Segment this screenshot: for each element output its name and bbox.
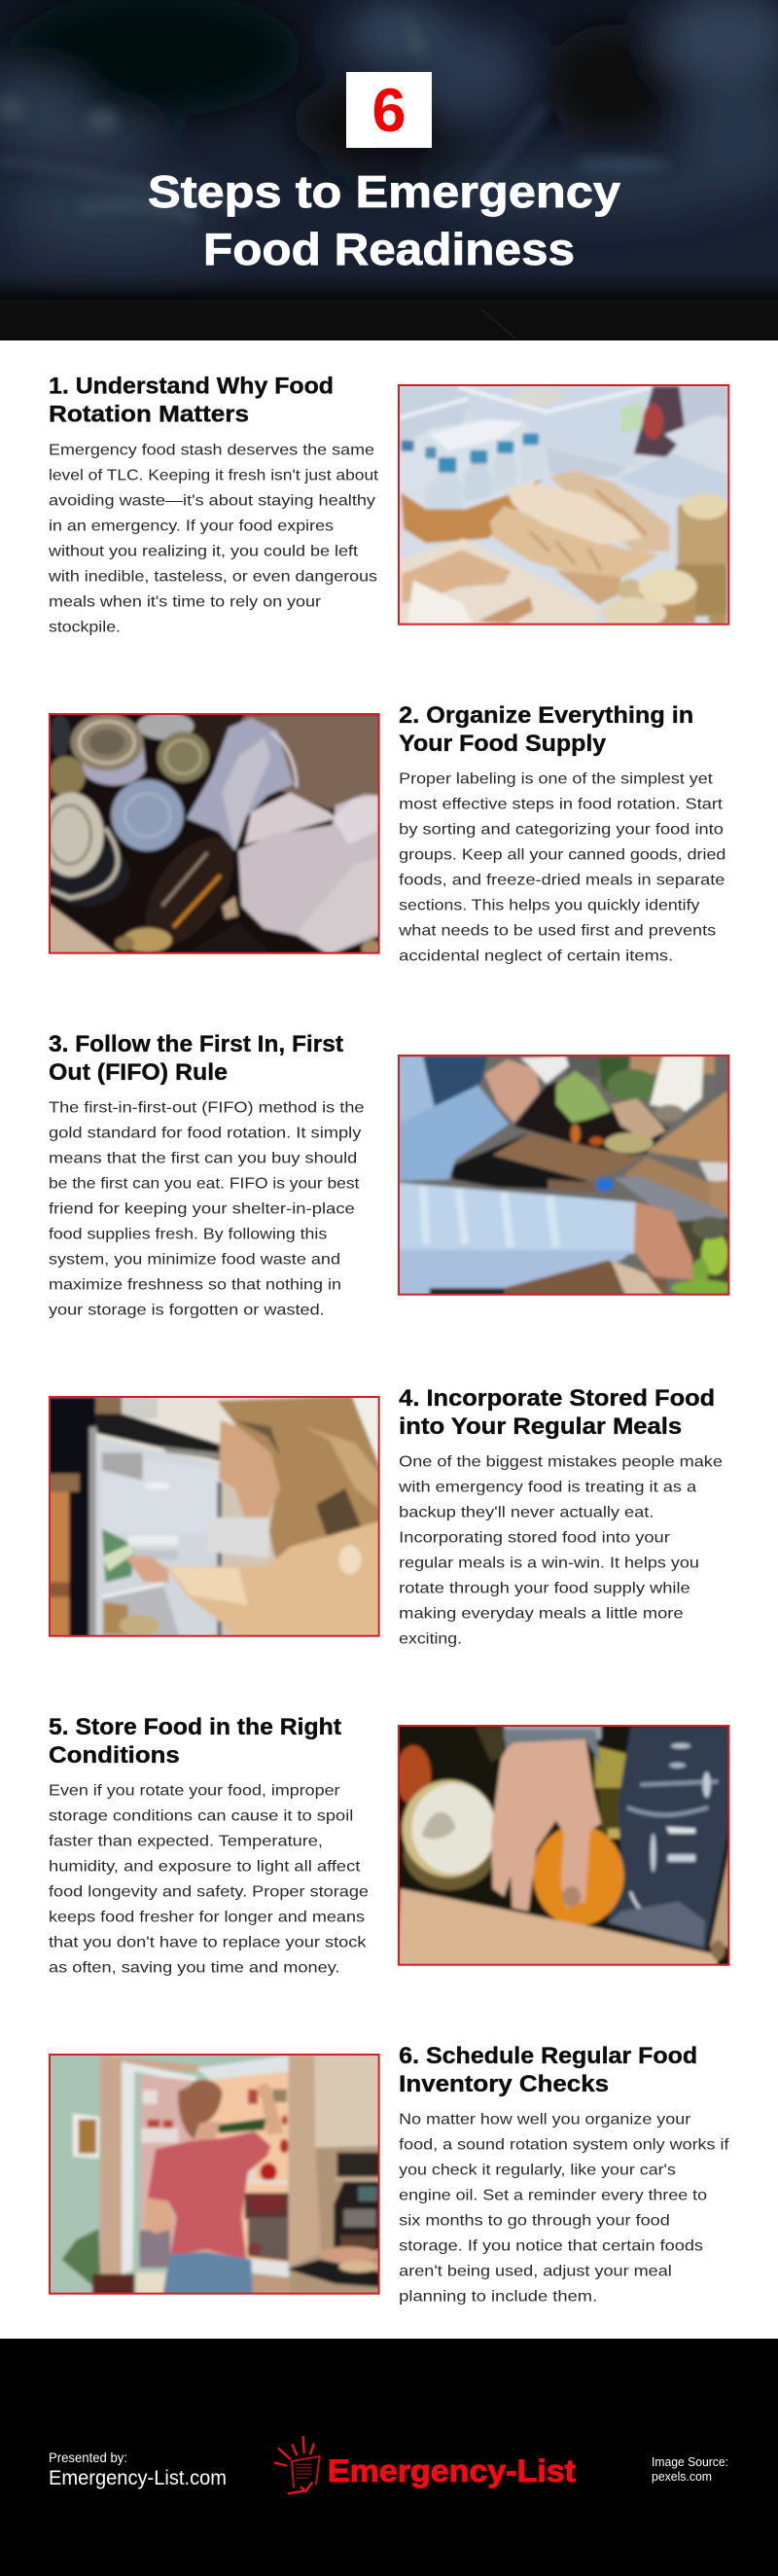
text block: step 3: gold standard for food rotation. It simply — [49, 1125, 361, 1142]
frame — [399, 1055, 728, 1295]
text block: step 1: meals when it's time to rely on your — [49, 593, 322, 610]
text block: step 2: most effective steps in food rotation. Start — [399, 797, 724, 813]
presenter credit — [49, 2450, 227, 2489]
text block: step 5: as often, saving you time and money. — [49, 1960, 340, 1977]
text block: step 2: Proper labeling is one of the simplest yet — [399, 771, 713, 788]
text block: step 6: six months to go through your food — [399, 2213, 670, 2230]
panel: step 2 — [39, 702, 725, 965]
text block: step 5: humidity, and exposure to light all affect — [49, 1859, 361, 1876]
heading: step 5: 5. Store Food in the Right — [49, 1714, 341, 1740]
image source credit — [652, 2454, 728, 2484]
text block: step 5: keeps food fresher for longer and means — [49, 1910, 365, 1926]
text block: step 4: making everyday meals a little more — [399, 1606, 684, 1623]
text block: step 6: you check it regularly, like your car's — [399, 2163, 676, 2179]
heading: step 5: Conditions — [49, 1742, 180, 1769]
heading: step 2 — [399, 702, 693, 757]
text block: step 1: in an emergency. If your food expires — [49, 518, 334, 534]
text block: step 3: The first-in-first-out (FIFO) method is the — [49, 1099, 365, 1117]
text block: step 4: rotate through your food supply while — [399, 1581, 690, 1597]
logo — [275, 2437, 576, 2493]
number badge: 6 — [371, 77, 407, 145]
text block: step 3: maximize freshness so that nothing in — [49, 1276, 341, 1294]
text block: step 2: groups. Keep all your canned goods, dried — [399, 847, 725, 864]
photo: people packing a food box — [394, 1050, 734, 1301]
text block: step 1: stockpile. — [49, 619, 121, 635]
text block: step 6: storage. If you notice that certain foods — [399, 2238, 703, 2255]
panel: step 6 — [44, 2043, 729, 2306]
photo: canned goods and cloth bags in a box — [39, 708, 384, 960]
text block: step 4: Incorporating stored food into your — [399, 1530, 671, 1547]
text block: step 1: with inedible, tasteless, or even dangerous — [48, 568, 377, 585]
image source credit: Image Source: — [652, 2454, 728, 2469]
heading: step 4 — [399, 1385, 715, 1440]
text block: step 1 — [48, 442, 379, 635]
text block: step 4: backup they'll never actually eat. — [399, 1505, 654, 1521]
title: Steps to Emergency — [148, 166, 620, 217]
footer panel — [0, 2339, 778, 2576]
heading: step 6: Inventory Checks — [399, 2071, 609, 2097]
text block: step 4 — [398, 1454, 723, 1648]
text block: step 2: what needs to be used first and prevents — [398, 923, 716, 940]
logo wordmark: Emergency-List — [328, 2453, 576, 2488]
photo: storage bins, water bottles, pasta and cans — [394, 379, 734, 630]
text block: step 4: with emergency food is treating it as a — [398, 1480, 696, 1496]
header panel — [0, 0, 778, 358]
title — [149, 175, 620, 266]
photo: woman in red shirt at an open refrigerator — [44, 2049, 384, 2300]
text block: step 1: level of TLC. Keeping it fresh isn't just about — [49, 467, 379, 483]
text block: step 2: sections. This helps you quickly identify — [399, 898, 699, 914]
frame — [50, 2055, 379, 2294]
heading: step 6 — [399, 2043, 697, 2097]
panel: step 4 — [44, 1385, 723, 1648]
text block: step 5: faster than expected. Temperature, — [49, 1834, 323, 1850]
frame — [399, 385, 728, 625]
heading: step 1: 1. Understand Why Food — [49, 374, 334, 400]
text block: step 6: aren't being used, adjust your meal — [399, 2264, 672, 2280]
text block: step 6: planning to include them. — [399, 2289, 597, 2306]
icon: checklist with rays — [275, 2437, 320, 2493]
number badge — [346, 72, 432, 148]
frame — [50, 714, 379, 953]
storm cloud background — [0, 0, 778, 358]
text block: step 3: friend for keeping your shelter-in-place — [49, 1200, 355, 1218]
text block: step 3: food supplies fresh. By following this — [49, 1226, 327, 1243]
panel: step 3 — [49, 1031, 734, 1319]
text block: step 5: storage conditions can cause it to spoil — [49, 1808, 353, 1825]
image source credit: pexels.com — [652, 2469, 712, 2484]
heading: step 4: 4. Incorporate Stored Food — [399, 1385, 715, 1412]
text block: step 1: Emergency food stash deserves the same — [49, 442, 374, 458]
text block: step 4: exciting. — [399, 1631, 462, 1648]
text block: step 3: means that the first can you buy should — [49, 1150, 357, 1167]
photo: hand holding an orange in a box — [394, 1720, 734, 1971]
presenter credit: Emergency-List.com — [49, 2467, 227, 2489]
text block: step 3 — [49, 1099, 365, 1319]
text block: step 3: system, you minimize food waste and — [49, 1251, 340, 1269]
text block: step 3: your storage is forgotten or wasted. — [49, 1302, 325, 1319]
frame — [50, 1397, 379, 1636]
text block: step 5: that you don't have to replace your stock — [49, 1935, 368, 1951]
text block: step 6: No matter how well you organize your — [399, 2112, 691, 2129]
heading: step 3: Out (FIFO) Rule — [49, 1059, 228, 1086]
text block: step 4: One of the biggest mistakes people make — [399, 1454, 723, 1471]
heading: step 3: 3. Follow the First In, First — [49, 1031, 343, 1057]
text block: step 4: regular meals is a win-win. It helps you — [399, 1556, 699, 1572]
heading: step 4: into Your Regular Meals — [399, 1413, 682, 1440]
text block: step 5: food longevity and safety. Proper storage — [49, 1884, 369, 1901]
text block: step 6: engine oil. Set a reminder every three to — [399, 2188, 707, 2204]
frame — [399, 1726, 728, 1965]
heading: step 1 — [49, 374, 334, 428]
photo: woman reaching into a refrigerator — [44, 1391, 384, 1642]
text block: step 2: accidental neglect of certain items. — [399, 948, 673, 965]
heading: step 3 — [49, 1031, 343, 1086]
text block: step 1: avoiding waste—it's about staying healthy — [49, 492, 375, 509]
text block: step 6: food, a sound rotation system only works if — [399, 2137, 729, 2154]
panel: step 5 — [49, 1714, 734, 1977]
text block: step 6 — [399, 2112, 729, 2306]
heading: step 5 — [49, 1714, 341, 1769]
text block: step 1: without you realizing it, you could be left — [48, 543, 359, 559]
heading: step 2: 2. Organize Everything in — [399, 702, 693, 729]
presenter credit: Presented by: — [49, 2450, 127, 2465]
heading: step 6: 6. Schedule Regular Food — [399, 2043, 697, 2069]
text block: step 2 — [398, 771, 725, 965]
text block: step 5: Even if you rotate your food, improper — [49, 1783, 340, 1800]
heading: step 2: Your Food Supply — [399, 731, 607, 757]
text block: step 2: foods, and freeze-dried meals in separate — [399, 873, 725, 889]
text block: step 3: be the first can you eat. FIFO is your best — [49, 1175, 360, 1193]
text block: step 5 — [49, 1783, 369, 1977]
title: Food Readiness — [203, 224, 575, 274]
panel: step 1 — [48, 374, 734, 635]
heading: step 1: Rotation Matters — [49, 402, 249, 428]
text block: step 2: by sorting and categorizing your food into — [399, 822, 724, 839]
